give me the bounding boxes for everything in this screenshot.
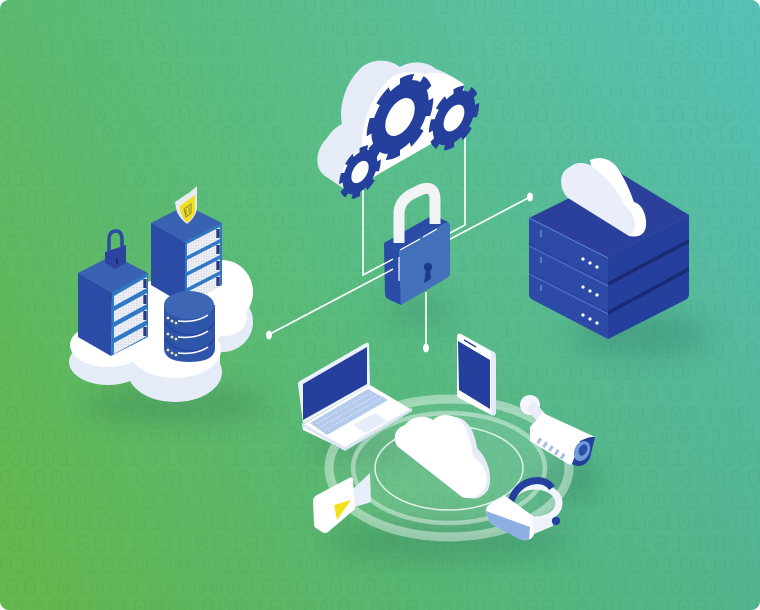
stack backing — [529, 225, 689, 332]
layer bottom — [529, 270, 689, 339]
layer top — [529, 173, 689, 286]
server right panels — [187, 227, 220, 304]
cloud base top — [70, 260, 253, 378]
server right — [151, 205, 222, 305]
line across lock — [384, 259, 393, 274]
video message icon — [313, 473, 371, 533]
lock front — [399, 222, 450, 305]
center cloud — [395, 415, 490, 499]
top cloud with gears — [317, 61, 477, 204]
security camera — [520, 395, 595, 466]
connector end dots — [266, 192, 533, 352]
device platform rings — [329, 399, 569, 537]
soft shadows — [80, 300, 710, 558]
adjustment knob — [552, 517, 560, 525]
lock highlight — [399, 229, 437, 281]
cloud on stack — [561, 158, 646, 236]
headband — [511, 486, 559, 520]
cloud back — [317, 61, 464, 188]
gear small — [341, 140, 379, 204]
layer middle — [529, 242, 689, 315]
visor — [486, 495, 534, 540]
gear large — [370, 64, 430, 170]
camera lens — [572, 437, 595, 466]
server left — [78, 255, 148, 356]
lock top — [384, 215, 448, 250]
touchpad — [353, 413, 387, 433]
laptop base — [302, 385, 412, 450]
small padlock — [105, 231, 126, 269]
cloud front — [342, 72, 465, 183]
tablet — [457, 334, 496, 416]
camera mount — [520, 395, 540, 415]
data center on cloud — [69, 186, 253, 402]
shield icon — [175, 186, 197, 224]
server stack with cloud — [529, 158, 689, 339]
VR headset — [486, 481, 560, 540]
laptop screen — [298, 343, 370, 424]
laptop — [298, 343, 412, 451]
lock side — [384, 243, 401, 305]
gear right — [431, 79, 477, 157]
keyboard — [310, 389, 388, 435]
keyhole — [424, 263, 432, 283]
padlock — [384, 188, 450, 305]
shackle — [399, 188, 435, 243]
database cylinder — [164, 291, 215, 362]
side strap — [532, 518, 553, 534]
server left panels — [114, 277, 147, 354]
connector lines — [268, 132, 530, 348]
cloud base side — [69, 292, 253, 402]
camera body — [530, 413, 595, 465]
